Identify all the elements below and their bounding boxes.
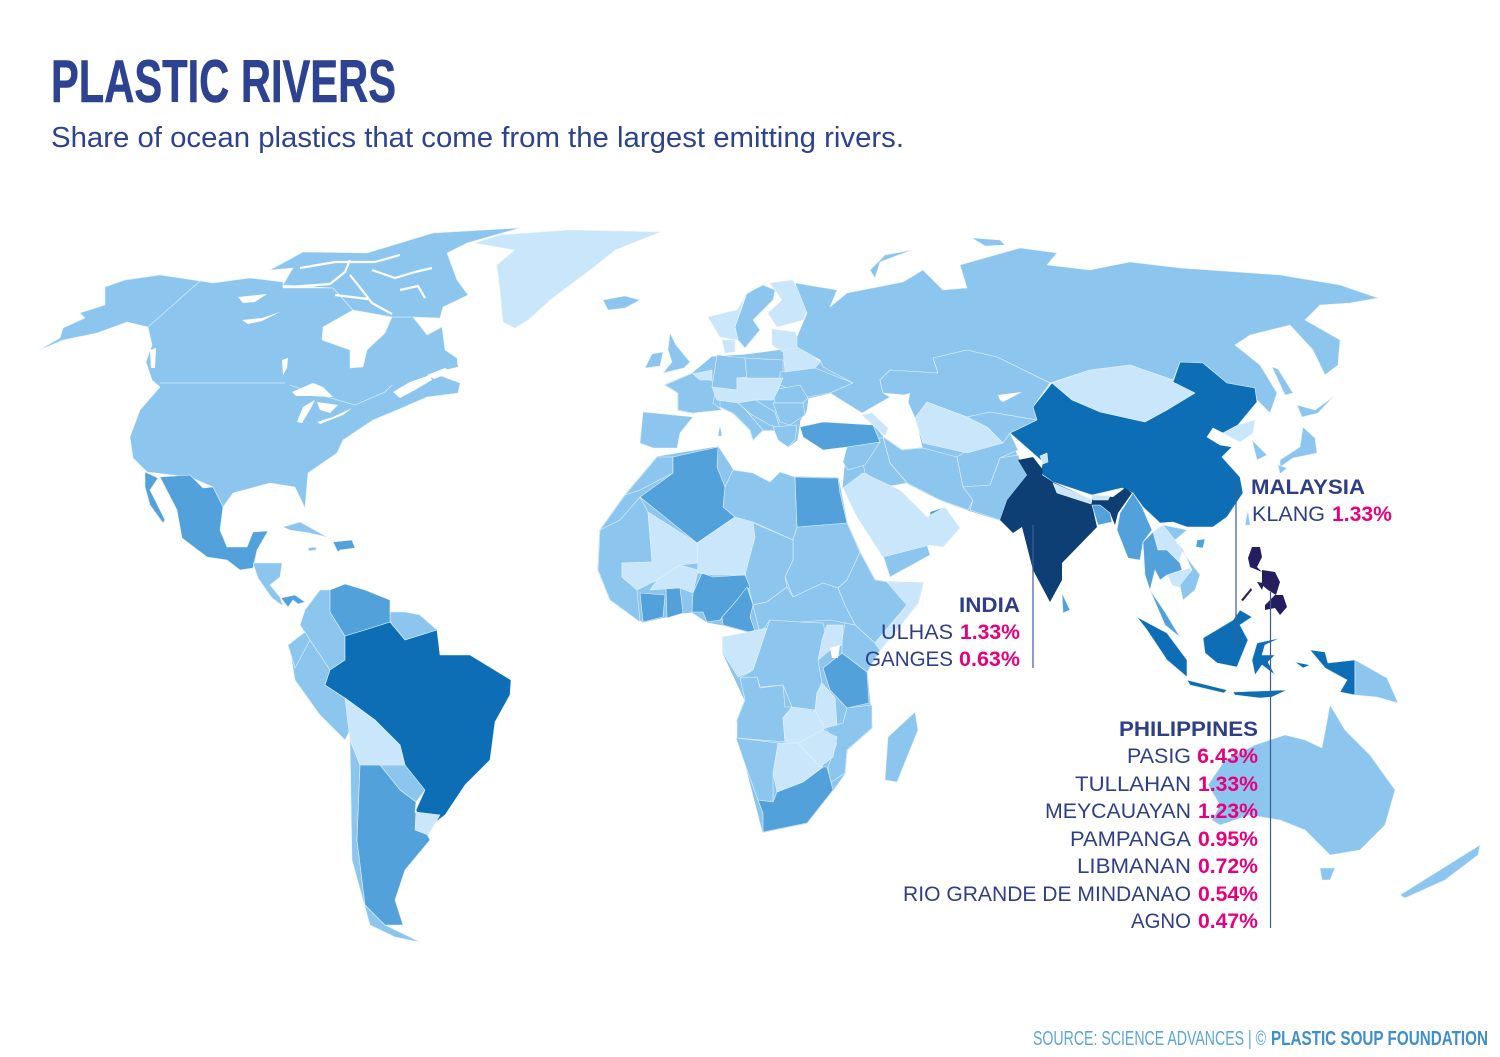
callout: philippines: PAMPANGA — [1070, 827, 1192, 851]
source footer: SOURCE: SCIENCE ADVANCES | © — [1033, 1028, 1266, 1050]
region: europe — [603, 280, 853, 448]
middle east landmass — [843, 400, 1037, 520]
world map — [39, 228, 1480, 942]
title: PLASTIC RIVERS — [51, 48, 396, 115]
callout: india: ULHAS — [881, 620, 953, 644]
callout: philippines: RIO GRANDE DE MINDANAO — [903, 882, 1191, 906]
callout: malaysia: MALAYSIA — [1251, 475, 1365, 499]
callout: malaysia: 1.33% — [1332, 502, 1392, 526]
callout: india: INDIA — [959, 593, 1020, 617]
callout: philippines: 0.47% — [1198, 909, 1258, 933]
callout: philippines: 0.54% — [1198, 882, 1258, 906]
callout: philippines: 1.23% — [1198, 799, 1258, 823]
callout: philippines — [903, 717, 1258, 933]
country: india — [1000, 457, 1132, 602]
lake victoria — [830, 645, 840, 658]
callout: philippines: 0.95% — [1198, 827, 1258, 851]
africa landmass — [598, 447, 923, 832]
callout: philippines: PHILIPPINES — [1119, 717, 1258, 741]
callout: philippines: 1.33% — [1198, 772, 1258, 796]
arctic channels — [148, 255, 432, 405]
country: china — [1010, 362, 1257, 527]
callout: india: GANGES — [865, 647, 953, 671]
callout: india: 1.33% — [960, 620, 1020, 644]
subtitle: Share of ocean plastics that come from the largest emitting rivers. — [51, 122, 904, 154]
callout: philippines: TULLAHAN — [1075, 772, 1191, 796]
region: africa — [598, 447, 923, 832]
region: north america — [39, 228, 520, 551]
callout: philippines: 6.43% — [1197, 744, 1258, 768]
europe landmass — [665, 345, 853, 447]
callout: philippines: AGNO — [1131, 909, 1191, 933]
callout: philippines: MEYCAUAYAN — [1045, 799, 1191, 823]
callout: philippines: LIBMANAN — [1077, 854, 1191, 878]
lakes and coastal gaps — [150, 294, 452, 424]
callout: india — [865, 593, 1020, 671]
callout: malaysia: KLANG — [1252, 502, 1325, 526]
region: south asia and southeast asia — [1040, 397, 1355, 698]
country: philippines — [1241, 547, 1287, 615]
callout: philippines: PASIG — [1127, 744, 1191, 768]
region: central asia and middle east — [800, 350, 1195, 577]
callout: india: 0.63% — [959, 647, 1020, 671]
region: mexico and central america — [145, 472, 355, 607]
region: south america — [288, 584, 511, 942]
leader lines — [1033, 482, 1270, 928]
region: russia — [795, 238, 1378, 413]
region: greenland — [475, 230, 660, 328]
callout: malaysia — [1251, 475, 1392, 526]
region: oceania — [1208, 660, 1480, 898]
callout: philippines: 0.72% — [1198, 854, 1258, 878]
